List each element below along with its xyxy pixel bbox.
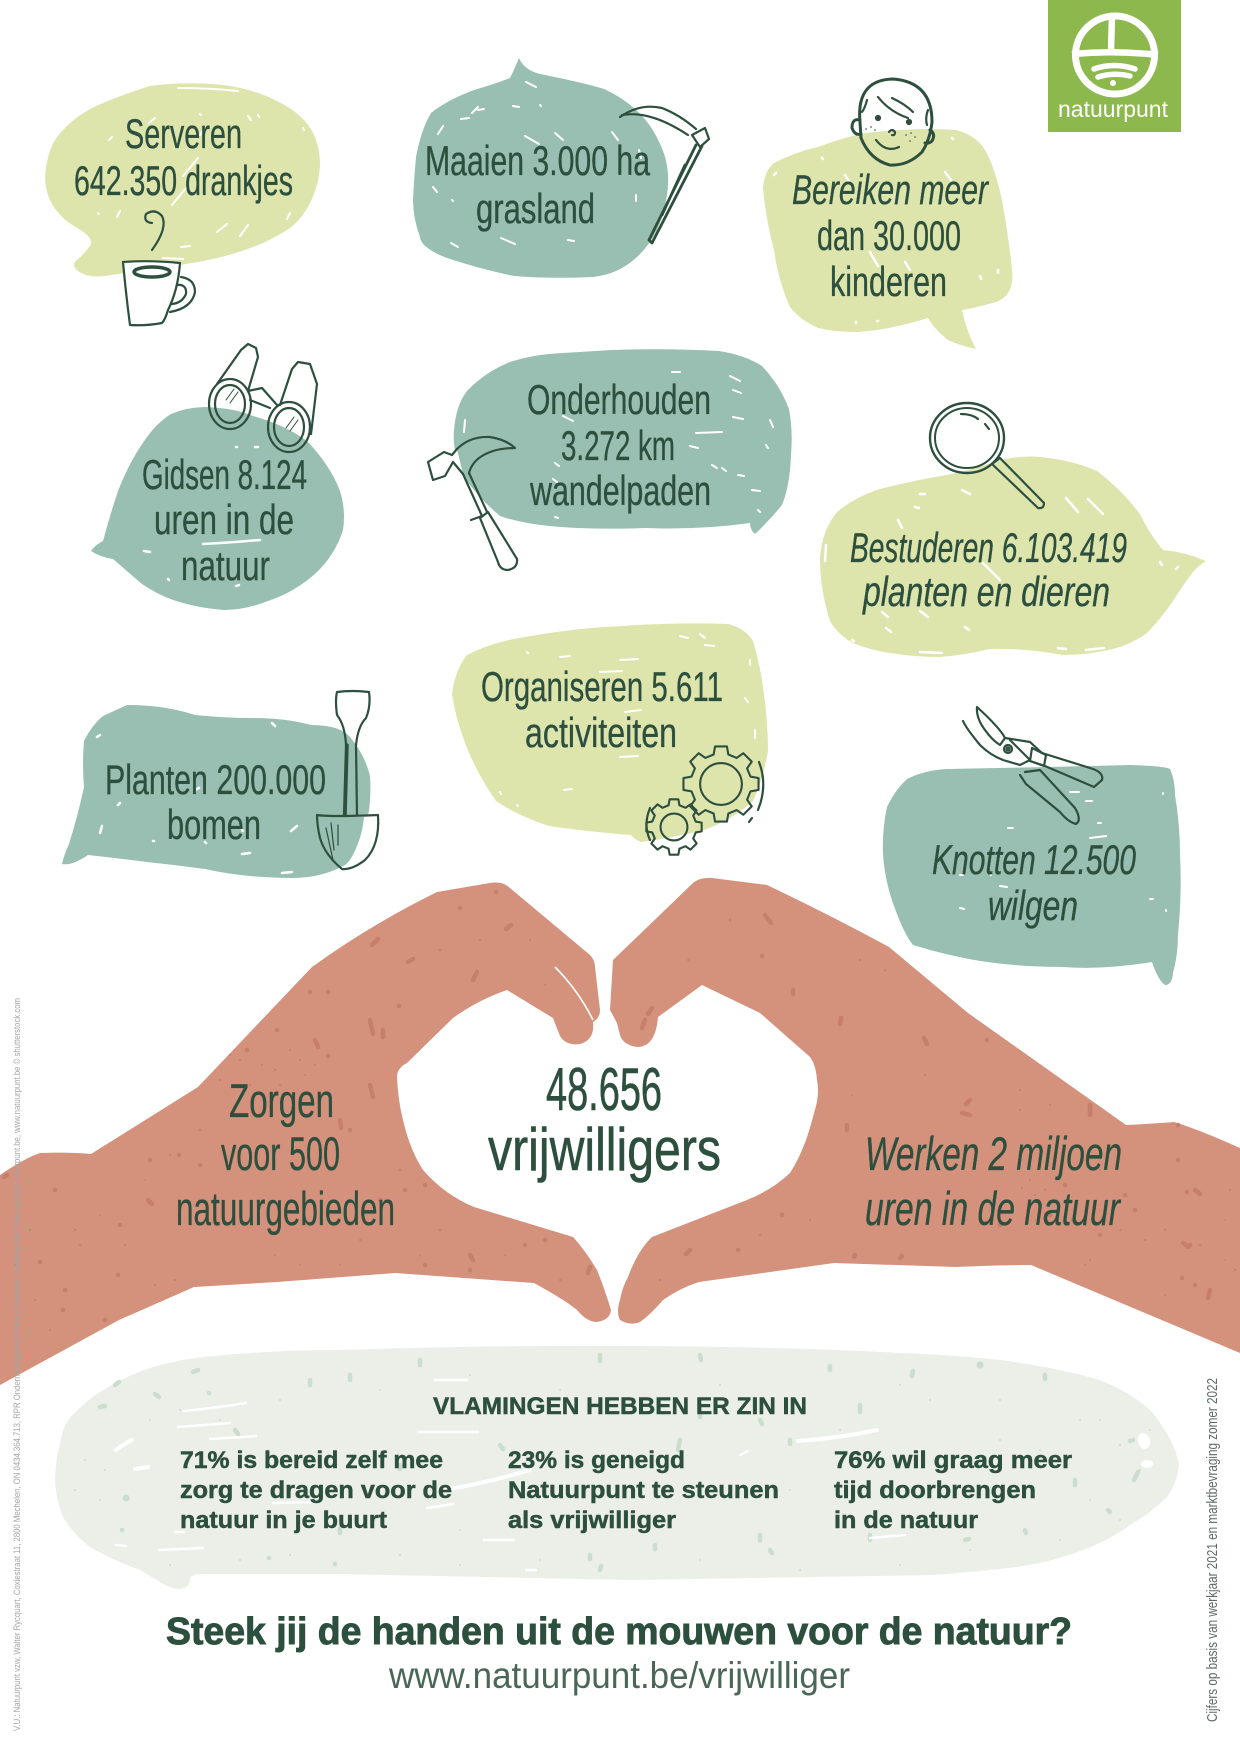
text: zorgen: natuurgebieden <box>176 1182 395 1235</box>
icon: binoculars <box>209 344 317 452</box>
icon: hammer <box>428 437 517 570</box>
text: knotten: wilgen <box>988 882 1078 929</box>
heading: vlamingen: VLAMINGEN HEBBEN ER ZIN IN <box>433 1393 807 1420</box>
text: gidsen <box>142 451 307 589</box>
column: 23%: als vrijwilliger <box>508 1507 676 1534</box>
text: gidsen: uren in de <box>154 496 294 543</box>
panel: vlamingen hebben er zin in <box>55 1346 1179 1589</box>
text: bestuderen <box>850 524 1127 615</box>
column: 23%: 23% is geneigd <box>508 1447 685 1474</box>
text: zorgen: voor 500 <box>221 1127 340 1180</box>
column: 76%: tijd doorbrengen <box>834 1477 1036 1504</box>
text: serveren <box>74 110 293 204</box>
text: bereiken: kinderen <box>830 258 947 305</box>
text: organiseren <box>481 663 723 756</box>
column: 71% <box>180 1447 452 1534</box>
column: 71%: natuur in je buurt <box>180 1507 387 1534</box>
panel: gidsen natuur <box>91 344 344 610</box>
text: planten: Planten 200.000 <box>105 756 326 803</box>
text: knotten: Knotten 12.500 <box>932 836 1136 883</box>
text: planten: bomen <box>167 801 261 848</box>
panel: serveren drankjes <box>45 83 320 325</box>
text: zorgen: Zorgen <box>229 1074 334 1127</box>
text: onderhouden: wandelpaden <box>529 467 711 514</box>
text: maaien: Maaien 3.000 ha <box>425 137 650 184</box>
icon: magnifying glass <box>930 403 1044 508</box>
text: gidsen: natuur <box>181 542 270 589</box>
text: werken: uren in de natuur <box>865 1182 1122 1235</box>
text: serveren: 642.350 drankjes <box>74 157 293 204</box>
panel: bestuderen planten en dieren <box>820 403 1206 657</box>
source note: Cijfers op basis van werkjaar 2021 en marktbevraging zomer 2022 <box>1204 1378 1221 1722</box>
text: bereiken: Bereiken meer <box>792 166 989 213</box>
text: zorgen <box>176 1074 395 1235</box>
panel: organiseren activiteiten <box>452 623 768 855</box>
text: organiseren: Organiseren 5.611 <box>481 663 723 710</box>
text: onderhouden: Onderhouden <box>527 376 711 423</box>
right hand <box>610 878 1240 1353</box>
panel: planten bomen <box>62 691 378 878</box>
panel: bereiken kinderen <box>763 79 1012 349</box>
column: 23%: Natuurpunt te steunen <box>508 1477 779 1504</box>
column: 23% <box>508 1447 779 1534</box>
icon: gears <box>646 746 763 855</box>
logo: natuurpunt: natuurpunt <box>1058 96 1169 122</box>
text: serveren: Serveren <box>125 110 242 157</box>
text: bereiken <box>792 166 989 305</box>
text: 48.656 vrijwilligers: vrijwilligers <box>488 1116 721 1183</box>
text: maaien: grasland <box>476 185 595 232</box>
text: gidsen: Gidsen 8.124 <box>142 451 307 498</box>
text: bestuderen: planten en dieren <box>861 568 1110 615</box>
text: 48.656 vrijwilligers: 48.656 <box>546 1056 662 1123</box>
panel: knotten wilgen <box>883 707 1181 985</box>
panel: onderhouden wandelpaden <box>428 349 792 570</box>
left hand <box>0 883 611 1385</box>
logo: natuurpunt <box>1048 0 1181 132</box>
legal text: V.U.: Natuurpunt vzw, Walter Rycquart, Coxiestraat 11, 2800 Mechelen, ON 0434.364.713, RPR Ondernemingsrechtbank Antwerpen, afdeling Mechelen, info@natuurpunt.be, www.natuurpunt.be © shutterstock.com <box>12 998 23 1731</box>
url: www.natuurpunt.be/vrijwilliger <box>388 1655 850 1696</box>
text: onderhouden: 3.272 km <box>561 422 675 469</box>
icon: scythe <box>620 107 709 243</box>
text: werken <box>865 1127 1122 1235</box>
column: 76% <box>834 1447 1072 1534</box>
text: werken: Werken 2 miljoen <box>865 1127 1122 1180</box>
call to action heading: Steek jij de handen uit de mouwen voor de natuur? <box>166 1611 1072 1653</box>
text: onderhouden <box>527 376 711 514</box>
text: organiseren: activiteiten <box>525 709 677 756</box>
column: 71%: 71% is bereid zelf mee <box>180 1447 443 1474</box>
text: knotten <box>932 836 1136 929</box>
text: maaien <box>425 137 650 232</box>
icon: coffee cup <box>123 211 195 325</box>
text: planten <box>105 756 326 848</box>
text: 48.656 vrijwilligers <box>488 1056 721 1183</box>
icon: shovel <box>317 691 378 869</box>
panel: maaien grasland <box>413 58 709 278</box>
icon: pruning shears <box>963 707 1102 824</box>
column: 76%: 76% wil graag meer <box>834 1447 1072 1474</box>
column: 71%: zorg te dragen voor de <box>180 1477 452 1504</box>
column: 76%: in de natuur <box>834 1507 978 1534</box>
icon: child face <box>852 79 934 165</box>
text: bereiken: dan 30.000 <box>817 212 961 259</box>
